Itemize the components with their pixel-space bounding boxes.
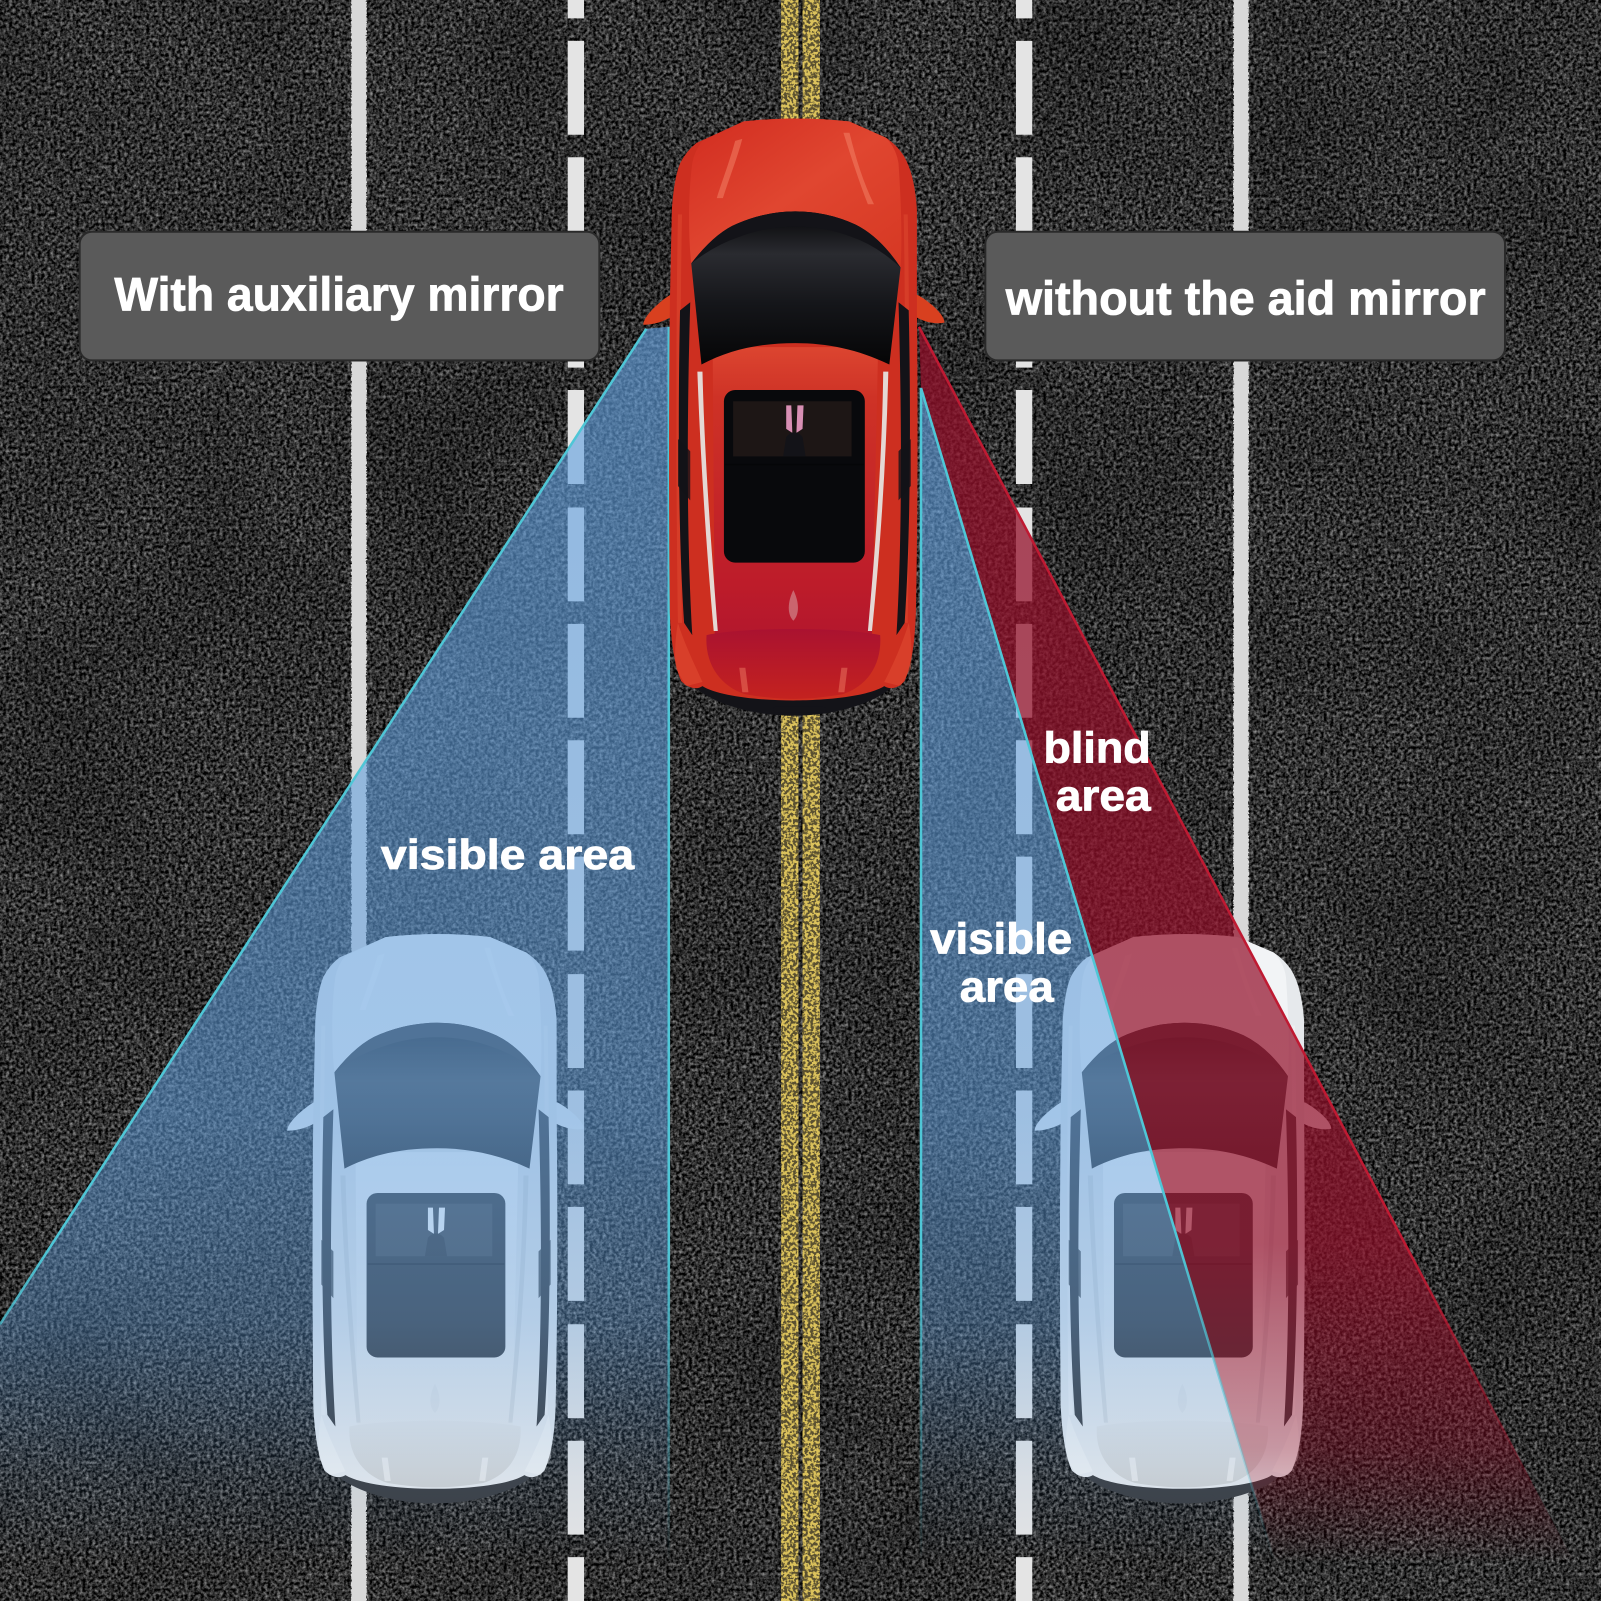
double yellow center line bbox=[781, 0, 820, 1601]
right visible area cone bbox=[921, 388, 1287, 1601]
label: blind area: blind bbox=[1044, 724, 1151, 773]
label: without the aid mirror: without the aid mirror bbox=[1005, 271, 1486, 324]
label: visible area, right cone: area bbox=[960, 963, 1054, 1012]
label: visible area, left cone: visible area bbox=[381, 831, 635, 878]
red car, center bbox=[643, 118, 944, 716]
label: visible area, right cone: visible bbox=[930, 915, 1072, 964]
right red blind area cone bbox=[919, 327, 1595, 1601]
label: visible area, right cone bbox=[930, 915, 1072, 1012]
label: with auxiliary mirror bbox=[80, 232, 599, 360]
white car, left lane bbox=[287, 934, 584, 1503]
label: with auxiliary mirror: With auxiliary mirror bbox=[114, 267, 564, 320]
label: without the aid mirror bbox=[985, 232, 1505, 360]
left solid white lane line bbox=[351, 0, 367, 1601]
label: blind area bbox=[1044, 724, 1151, 821]
road markings bbox=[351, 0, 1249, 1601]
left dashed lane line bbox=[568, 0, 584, 1601]
right solid white lane line bbox=[1233, 0, 1249, 1601]
label: blind area: area bbox=[1056, 772, 1151, 821]
right dashed lane line bbox=[1016, 0, 1032, 1601]
left visible area cone bbox=[0, 327, 669, 1601]
white car, right lane bbox=[1035, 934, 1331, 1503]
